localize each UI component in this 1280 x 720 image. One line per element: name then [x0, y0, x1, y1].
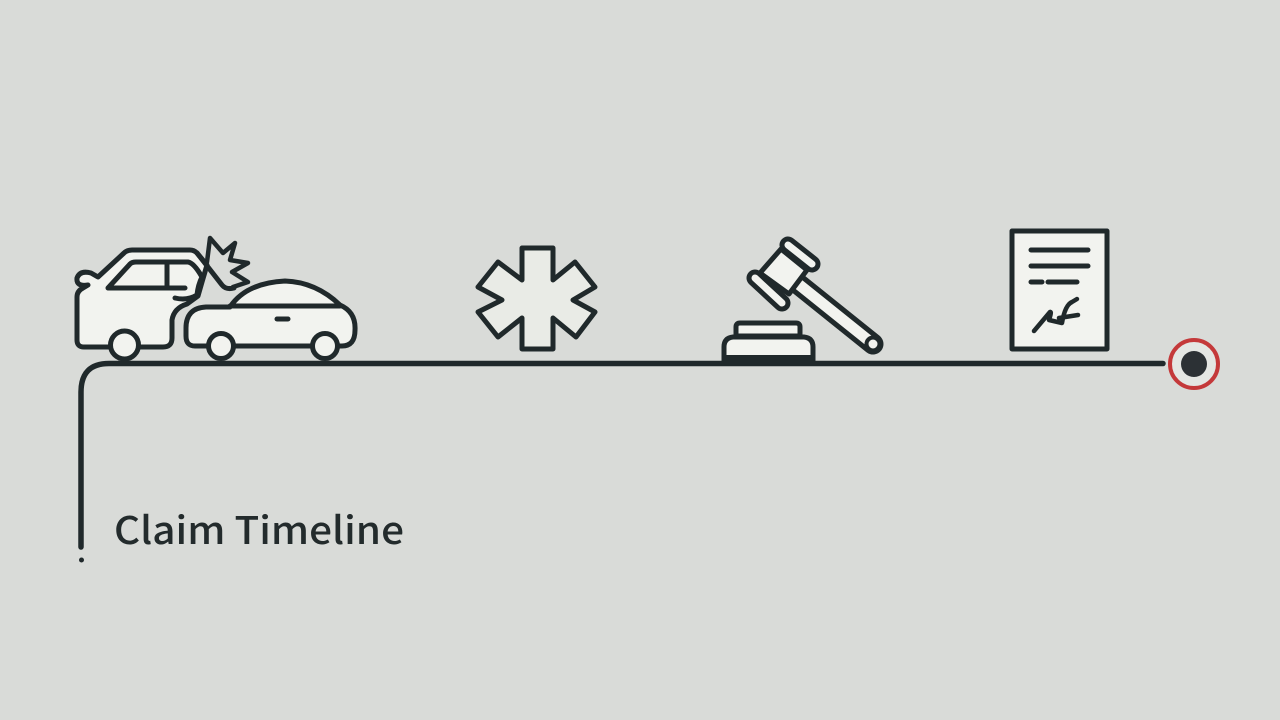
icon: star of life	[478, 248, 595, 349]
gavel block base	[724, 337, 813, 361]
gavel head	[760, 249, 807, 294]
rear car body	[77, 250, 207, 347]
front car body	[186, 281, 355, 346]
impact burst	[207, 238, 248, 287]
document text lines	[1031, 250, 1088, 282]
end marker	[1170, 340, 1218, 388]
gavel handle	[797, 283, 873, 344]
signature	[1034, 299, 1078, 331]
rear car window	[108, 262, 202, 299]
title: Claim Timeline	[114, 500, 404, 555]
front car roof line	[230, 304, 340, 308]
document page	[1012, 231, 1107, 349]
door handle	[277, 316, 288, 322]
icon: car collision	[77, 238, 355, 359]
timeline line	[81, 364, 1163, 547]
gavel block top	[736, 323, 800, 336]
gavel top cap	[788, 245, 812, 264]
rear car fender edge	[197, 253, 234, 289]
gavel bottom cap	[755, 278, 782, 303]
timeline start dot	[79, 558, 84, 562]
icon: gavel	[724, 245, 880, 363]
icon: signed document	[1012, 231, 1107, 349]
wheels	[110, 331, 138, 359]
